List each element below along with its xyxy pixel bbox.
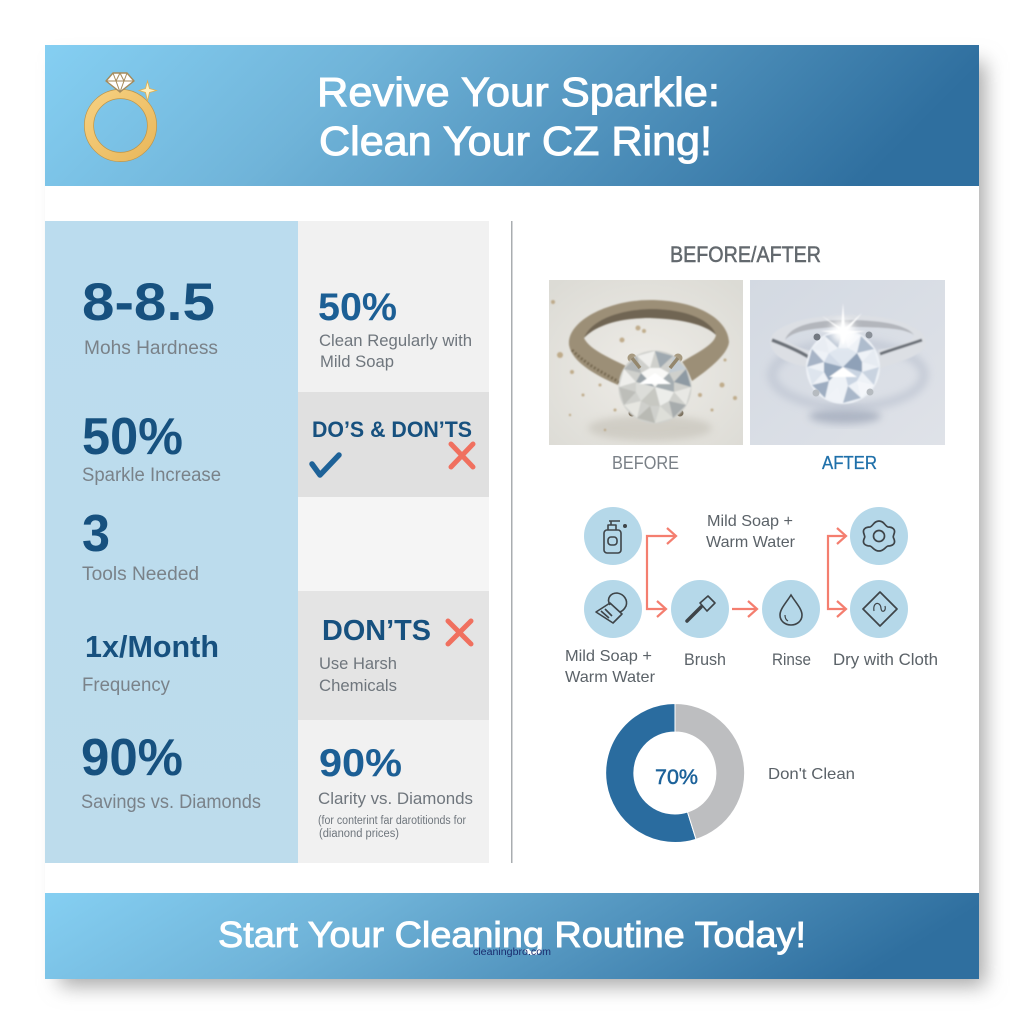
stat: tools needed: Tools Needed (82, 564, 199, 585)
flow labels: bottom: Dry with Cloth (833, 651, 938, 669)
donut chart (606, 703, 745, 842)
panel: don'ts: Use Harsh (319, 654, 397, 673)
gem: after (806, 330, 880, 404)
panel: don'ts: Chemicals (319, 676, 397, 695)
tip: clarity: Clarity vs. Diamonds (318, 789, 473, 808)
icon: cross (448, 621, 471, 644)
stat: tools needed: 3 (82, 505, 110, 563)
tip: clarity: 90% (319, 742, 402, 785)
panel: tips column (298, 221, 489, 863)
stat: frequency: Frequency (82, 675, 170, 696)
step: scrub brush (671, 580, 729, 638)
stat: sparkle increase (82, 408, 221, 486)
flow label: top (706, 513, 796, 551)
flow labels: bottom: Mild Soap + (565, 648, 652, 665)
stat: savings: 90% (81, 729, 183, 787)
panel: do's and don'ts: DO’S & DON’TS (312, 417, 472, 442)
tip: clean regularly: Mild Soap (320, 352, 394, 371)
step: flower gear (850, 507, 908, 565)
step: cloth (850, 580, 908, 638)
label: before: BEFORE (612, 453, 679, 473)
flow label: top: Mild Soap + (707, 513, 793, 530)
title (317, 69, 720, 164)
stat: frequency: 1x/Month (85, 629, 219, 664)
icon: check mark (312, 455, 339, 475)
panel: key stats (45, 221, 298, 863)
panel: don'ts: DON’TS (322, 615, 431, 647)
flow label: top: Warm Water (706, 534, 796, 551)
flow arrows (647, 528, 846, 617)
donut chart: 70% (655, 766, 698, 789)
stat: savings (81, 729, 261, 813)
tip: clean regularly: Clean Regularly with (319, 331, 472, 350)
title: Clean Your CZ Ring! (319, 118, 712, 164)
header banner (45, 45, 979, 186)
panel: don'ts (298, 591, 489, 720)
title: Revive Your Sparkle: (317, 69, 720, 115)
footer banner: Start Your Cleaning Routine Today! (218, 914, 806, 955)
icon: cross (451, 444, 473, 467)
step: water drop (762, 580, 820, 638)
watermark: cleaningbro.com (473, 947, 551, 958)
tip: clarity: (dianond prices) (319, 828, 399, 840)
photo: before, tarnished ring (549, 280, 743, 445)
donut label: Don't Clean (768, 766, 855, 783)
stat: Mohs hardness (82, 273, 218, 359)
segment: blue (606, 704, 696, 842)
tip: clean regularly (318, 286, 472, 371)
step: brush (584, 580, 642, 638)
stat: sparkle increase: Sparkle Increase (82, 465, 221, 486)
step: soap bottle (584, 507, 642, 565)
icon: gold ring with diamond (89, 73, 156, 157)
stat: tools needed (82, 505, 199, 585)
gem: before (618, 350, 692, 424)
tip: clean regularly: 50% (318, 286, 397, 329)
stat: Mohs hardness: 8-8.5 (82, 273, 215, 332)
flow labels: bottom (565, 648, 938, 686)
flow labels: bottom: Rinse (772, 651, 811, 669)
tip: clarity (318, 742, 473, 840)
process flow diagram (565, 507, 938, 686)
sparkle glint (822, 306, 864, 346)
stat: Mohs hardness: Mohs Hardness (84, 338, 218, 359)
stat: savings: Savings vs. Diamonds (81, 792, 261, 813)
tip: clarity: (for conterint far darotitionds for (318, 815, 466, 827)
label: after: AFTER (822, 453, 877, 473)
footer banner (45, 893, 979, 979)
flow labels: bottom: Warm Water (565, 669, 656, 686)
panel: do's and don'ts (298, 392, 489, 497)
segment: gray (675, 703, 745, 839)
stat: sparkle increase: 50% (82, 408, 183, 466)
flow labels: bottom: Brush (684, 651, 726, 669)
photo: after, polished ring (750, 280, 945, 445)
heading: before/after: BEFORE/AFTER (670, 242, 821, 267)
stat: frequency (82, 629, 219, 696)
